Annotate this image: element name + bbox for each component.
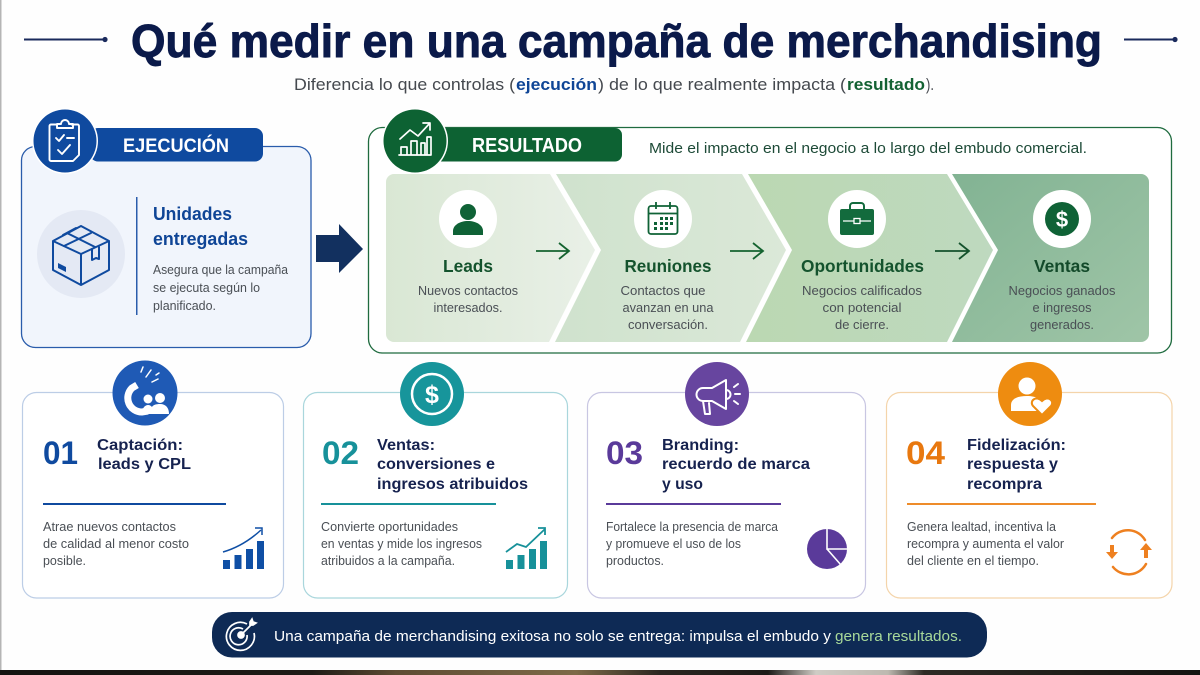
description: ventas: en ventas y mide los ingresos (321, 537, 482, 551)
stage: reuniones: Reuniones (624, 256, 712, 276)
subtitle: ejecución (516, 76, 597, 94)
description: fidelización: Genera lealtad, incentiva la (907, 520, 1056, 534)
stage: ventas: generados. (1030, 318, 1094, 332)
description: branding: Fortalece la presencia de marca (606, 520, 778, 534)
description: ejecución (153, 263, 288, 313)
arrow: oportunidades to ventas (935, 243, 969, 259)
stage: oportunidades: de cierre. (835, 318, 889, 332)
icon: briefcase (840, 203, 874, 235)
stage: oportunidades (801, 190, 924, 332)
description: fidelización: del cliente en el tiempo. (907, 554, 1039, 568)
panel: ejecución (22, 108, 311, 348)
funnel chevrons (386, 174, 1149, 342)
description: ejecución: planificado. (153, 299, 216, 313)
icon: target (226, 619, 256, 650)
heading: fidelización (967, 437, 1066, 493)
description: captación: de calidad al menor costo (43, 537, 189, 551)
title: Qué medir en una campaña de merchandising (131, 15, 1102, 67)
arrow: leads to reuniones (536, 243, 569, 259)
subtitle: Diferencia lo que controlas ( (294, 76, 516, 94)
stage: oportunidades: con potencial (822, 301, 902, 315)
stage: leads: Nuevos contactos (418, 284, 518, 298)
description: captación: Atrae nuevos contactos (43, 520, 176, 534)
heading: fidelización: Fidelización: (967, 437, 1066, 454)
icon: megaphone (685, 362, 749, 426)
card 02: ventas: 02 (322, 435, 359, 471)
icon: growth chart (382, 108, 448, 174)
icon: dollar coin: $ (1056, 207, 1068, 232)
heading: branding: Branding: (662, 437, 739, 454)
description: ventas: Convierte oportunidades (321, 520, 458, 534)
heading: ventas: Ventas: (377, 437, 435, 454)
header pill: ejecución (90, 128, 263, 162)
stage: ventas (1008, 190, 1116, 332)
description: ventas (321, 520, 482, 568)
description: branding: y promueve el uso de los (606, 537, 741, 551)
icon: dollar coin (400, 362, 464, 426)
heading: ventas: conversiones e (377, 456, 495, 473)
divider (136, 197, 138, 315)
subtitle: resultado: Mide el impacto en el negocio a lo largo del embudo comercial. (649, 140, 1087, 157)
icon: person with heart (998, 362, 1062, 426)
description: fidelización (907, 520, 1064, 568)
header pill: resultado: RESULTADO (472, 135, 582, 157)
heading: captación: Captación: (97, 437, 183, 454)
card 03: branding (588, 362, 866, 598)
icon: clipboard (32, 108, 98, 174)
bottom photo strip (0, 670, 1200, 675)
heading: fidelización: respuesta y (967, 456, 1058, 473)
heading: captación (97, 437, 191, 473)
card 04: fidelización: 04 (906, 435, 945, 471)
description: ejecución: se ejecuta según lo (153, 281, 260, 295)
description: branding (606, 520, 778, 568)
heading: unidades entregadas: Unidades (153, 204, 232, 224)
header pill: ejecución: EJECUCIÓN (123, 135, 229, 157)
card 03: branding: 03 (606, 435, 643, 471)
arrow: ejecución to resultado (316, 224, 363, 273)
description: branding: productos. (606, 554, 664, 568)
icon: cycle arrows (1106, 530, 1152, 574)
stage: ventas: Ventas (1034, 256, 1090, 276)
stage: leads: interesados. (434, 301, 502, 315)
stage: leads (418, 190, 518, 315)
stage: reuniones: conversación. (628, 318, 708, 332)
subtitle: ) de lo que realmente impacta ( (598, 76, 847, 94)
icon: calendar (648, 202, 678, 234)
heading: unidades entregadas: entregadas (153, 229, 248, 249)
callout text: genera resultados. (835, 628, 962, 645)
description: fidelización: recompra y aumenta el valor (907, 537, 1064, 551)
icon: dollar coin (1045, 202, 1079, 236)
icon: growth bars (506, 528, 547, 569)
arrow: reuniones to oportunidades (730, 243, 763, 259)
icon: person (453, 204, 483, 235)
stage: reuniones: avanzan en una (622, 301, 714, 315)
heading: unidades entregadas (153, 204, 248, 249)
panel: resultado (368, 108, 1172, 353)
heading: ventas: ingresos atribuidos (377, 476, 528, 493)
description: ventas: atribuidos a la campaña. (321, 554, 455, 568)
description: captación: posible. (43, 554, 86, 568)
card 01: captación (22, 360, 284, 598)
stage: oportunidades: Negocios calificados (802, 284, 922, 298)
subtitle (294, 76, 934, 94)
heading: captación: leads y CPL (98, 456, 191, 473)
card 04: fidelización (886, 362, 1172, 598)
stage: reuniones (620, 190, 714, 332)
header pill: resultado (430, 128, 622, 162)
stage: leads: Leads (443, 256, 493, 276)
icon: pie chart (807, 529, 847, 569)
title decoration left (24, 37, 108, 42)
description: captación (43, 520, 189, 568)
heading: branding: y uso (662, 476, 703, 493)
callout text: Una campaña de merchandising exitosa no solo se entrega: impulsa el embudo y (274, 628, 832, 645)
title decoration right (1124, 37, 1178, 42)
heading: branding: recuerdo de marca (662, 456, 810, 473)
callout banner (212, 612, 987, 658)
stage: oportunidades: Oportunidades (801, 256, 924, 276)
subtitle: resultado (847, 76, 925, 94)
subtitle: ). (926, 76, 934, 94)
description: ejecución: Asegura que la campaña (153, 263, 288, 277)
icon: dollar coin: $ (425, 381, 439, 409)
stage: ventas: Negocios ganados (1008, 284, 1116, 298)
heading: branding (662, 437, 810, 493)
heading: fidelización: recompra (967, 476, 1042, 493)
icon: box (37, 210, 125, 298)
stage: ventas: e ingresos (1032, 301, 1092, 315)
icon: magnet and people (112, 360, 178, 426)
card 01: captación: 01 (43, 435, 78, 471)
icon: rising bars (223, 528, 264, 569)
stage: reuniones: Contactos que (620, 284, 706, 298)
card 02: ventas (304, 362, 568, 598)
heading: ventas (377, 437, 528, 493)
